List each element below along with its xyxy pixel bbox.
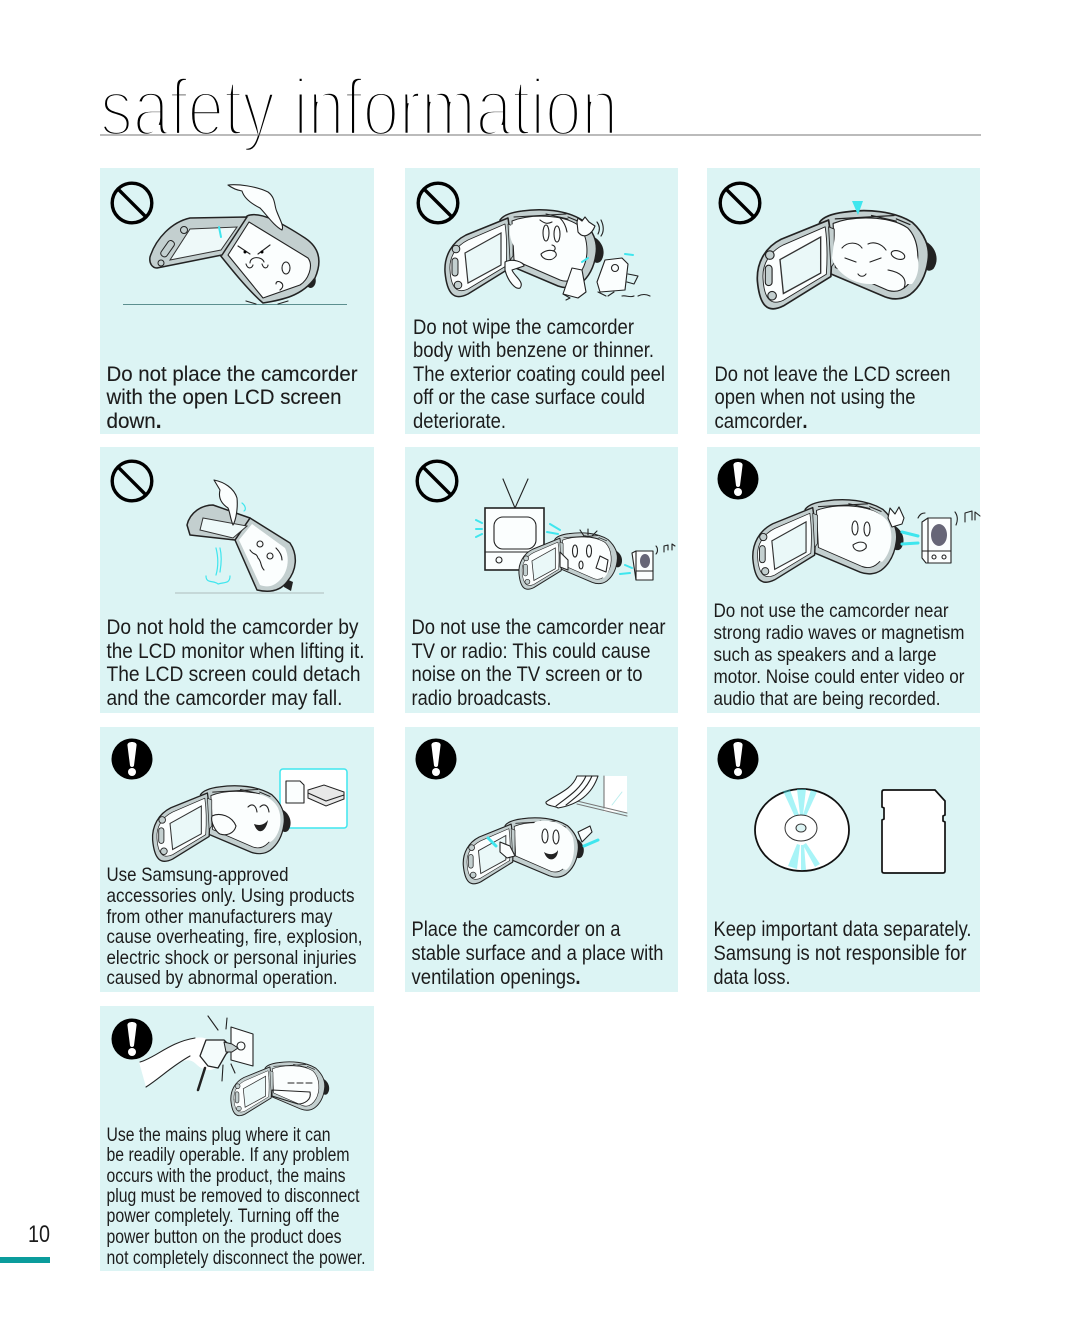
text [412, 918, 664, 989]
text: strong radio waves or magnetism [714, 622, 964, 644]
illustration: memory card [882, 790, 945, 873]
text: radio broadcasts. [412, 687, 552, 710]
text: Use the mains plug where it can [106, 1125, 330, 1146]
panel: stable surface [405, 727, 678, 992]
panel: LCD screen down [100, 168, 374, 434]
text: Do not wipe the camcorder [413, 316, 634, 339]
text: Do not use the camcorder near [714, 600, 949, 622]
text: TV or radio: This could cause [412, 640, 650, 663]
panel: benzene or thinner [405, 168, 678, 434]
icon: prohibited [417, 461, 457, 501]
text: off or the case surface could [413, 386, 645, 409]
text: down. [106, 410, 162, 433]
icon: caution [112, 738, 152, 780]
icon: prohibited [720, 183, 760, 223]
illustration: hand unplugging and camcorder [139, 1016, 329, 1116]
panel: mains plug [100, 1006, 374, 1271]
text: electric shock or personal injuries [106, 947, 357, 969]
text: accessories only. Using products [106, 885, 355, 907]
illustration: camcorder near speaker [753, 500, 980, 582]
text: Samsung is not responsible for [714, 942, 966, 965]
icon: caution [416, 738, 456, 780]
text: camcorder. [714, 410, 808, 433]
text: data loss. [714, 966, 790, 989]
text [106, 1125, 366, 1269]
text: ventilation openings. [412, 966, 580, 989]
text [106, 363, 358, 433]
text: and the camcorder may fall. [106, 687, 342, 710]
text: body with benzene or thinner. [413, 339, 654, 362]
text: power button on the product does [106, 1227, 342, 1248]
illustration: camcorder near TV and speaker [476, 479, 675, 589]
text: The LCD screen could detach [106, 663, 360, 686]
text: Place the camcorder on a [412, 918, 621, 941]
text: Keep important data separately. [714, 918, 972, 941]
panel: TV or radio [405, 447, 678, 713]
text [714, 918, 972, 989]
icon: caution [112, 1018, 152, 1060]
text: Do not place the camcorder [106, 363, 358, 386]
text: power completely. Turning off the [106, 1206, 340, 1227]
text [106, 616, 364, 710]
text: plug must be removed to disconnect [106, 1186, 360, 1207]
text: deteriorate. [413, 410, 506, 433]
text: from other manufacturers may [106, 906, 333, 928]
icon: prohibited [112, 183, 152, 223]
illustration: camcorder placed LCD down [123, 185, 347, 304]
panel: do not lift by LCD [100, 447, 374, 713]
panel: approved accessories [100, 727, 374, 992]
text: Use Samsung-approved [106, 864, 288, 886]
text: cause overheating, fire, explosion, [106, 926, 362, 948]
illustration: disc [755, 789, 849, 871]
text: stable surface and a place with [412, 942, 664, 965]
text: caused by abnormal operation. [106, 967, 338, 989]
text [714, 363, 950, 433]
panel: LCD left open [707, 168, 980, 434]
icon: prohibited [418, 183, 458, 223]
text [714, 600, 965, 710]
text [106, 864, 362, 989]
text: Do not leave the LCD screen [714, 363, 950, 386]
text: the LCD monitor when lifting it. [106, 640, 364, 663]
text: such as speakers and a large [714, 644, 936, 666]
illustration: idle camcorder [757, 201, 937, 309]
text: Do not hold the camcorder by [106, 616, 359, 639]
panel: keep data separately [707, 727, 980, 992]
text: open when not using the [714, 386, 916, 409]
page number: 10 [28, 1221, 50, 1248]
text: motor. Noise could enter video or [714, 666, 965, 688]
illustration: camcorder lifted by LCD [175, 480, 324, 593]
icon: caution [718, 458, 758, 500]
text: noise on the TV screen or to [412, 663, 642, 686]
text: The exterior coating could peel [413, 363, 665, 386]
title: safety information [100, 63, 618, 153]
illustration: camcorder with thinner bottles [445, 210, 650, 300]
illustration: camcorder with window [463, 776, 627, 884]
text: be readily operable. If any problem [106, 1145, 350, 1166]
icon: caution [718, 738, 758, 780]
text [412, 616, 666, 710]
icon: prohibited [112, 461, 152, 501]
panel: radio waves or magnetism [707, 447, 980, 713]
text: not completely disconnect the power. [106, 1248, 366, 1269]
text: Do not use the camcorder near [412, 616, 666, 639]
illustration: camcorder and accessories [153, 769, 347, 861]
text [413, 316, 665, 433]
text: occurs with the product, the mains [106, 1166, 346, 1187]
text: with the open LCD screen [106, 386, 342, 409]
text: audio that are being recorded. [714, 688, 940, 710]
